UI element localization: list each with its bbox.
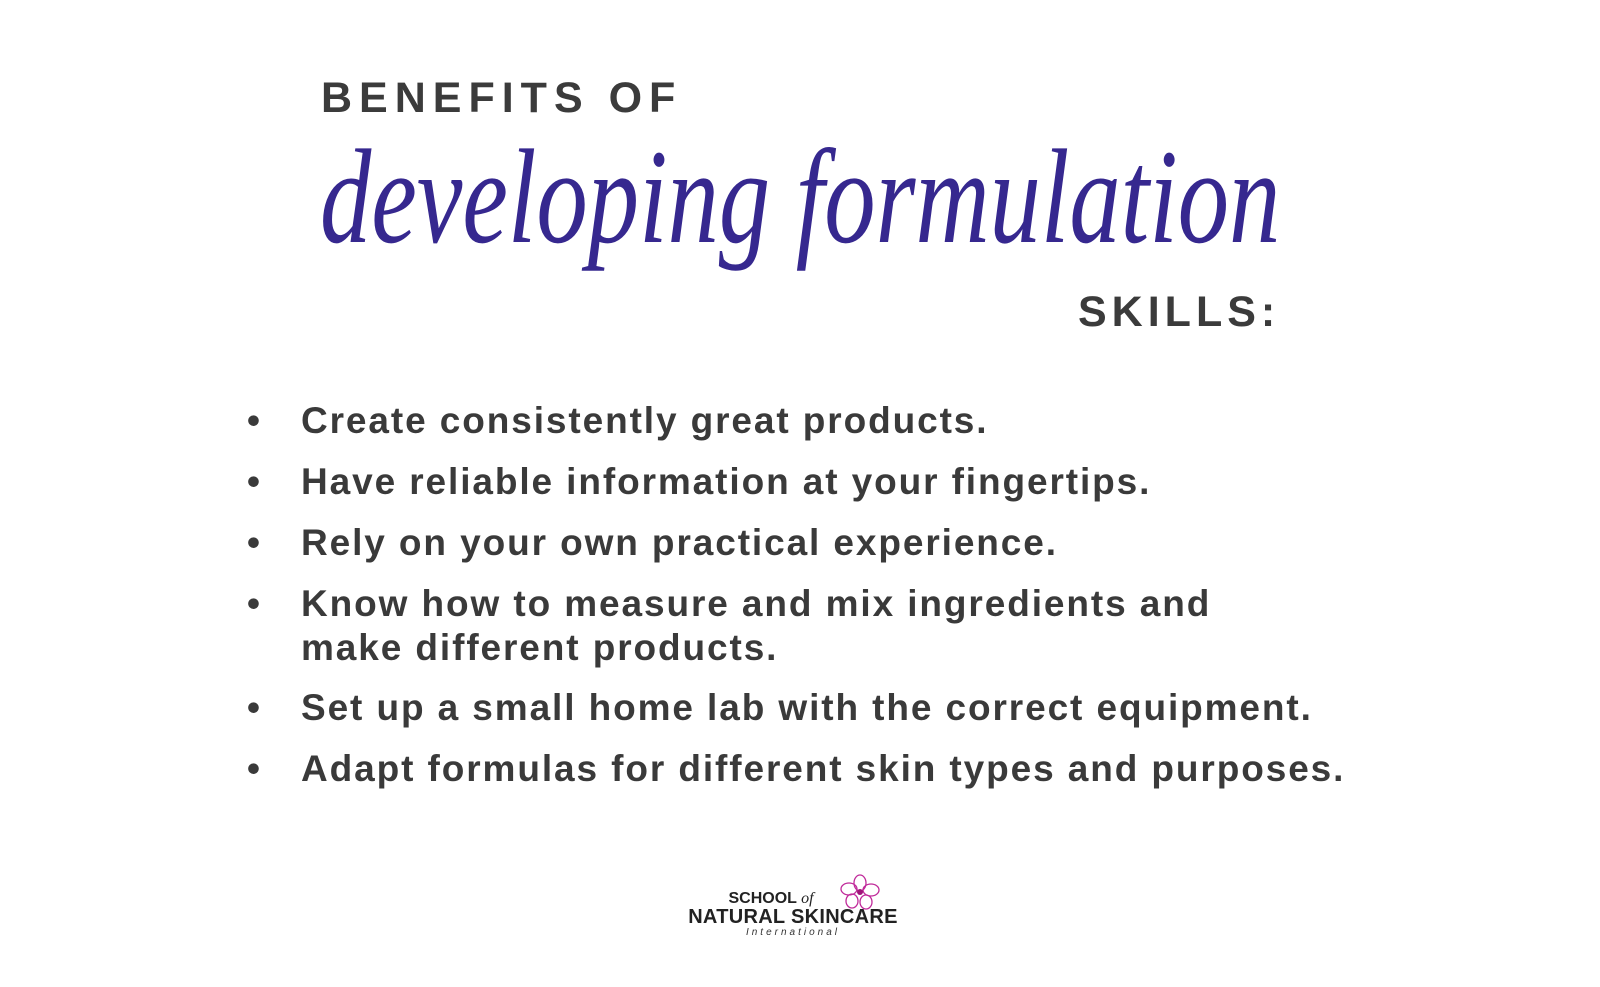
bullet 2: • — [247, 461, 262, 502]
icon: flower — [840, 874, 880, 910]
bullet 4: • — [247, 583, 262, 624]
bullet 6: • — [247, 748, 262, 789]
logo — [688, 874, 898, 938]
logo: International — [746, 927, 840, 938]
bullet 4 — [247, 583, 1211, 668]
bullet 4: Know how to measure and mix ingredients and — [301, 583, 1211, 624]
bullet 1: • — [247, 400, 262, 441]
logo: NATURAL SKINCARE — [688, 906, 898, 928]
bullet 5: • — [247, 687, 262, 728]
bullet 3: Rely on your own practical experience. — [301, 522, 1058, 563]
logo: SCHOOL of — [728, 890, 814, 907]
heading: script title: developing formulation — [320, 123, 1280, 272]
heading: skills: SKILLS: — [1078, 288, 1280, 336]
bullet 1: Create consistently great products. — [301, 400, 988, 441]
bullet 6: Adapt formulas for different skin types and purposes. — [301, 748, 1345, 789]
bullet 2: Have reliable information at your fingertips. — [301, 461, 1151, 502]
bullet 5: Set up a small home lab with the correct equipment. — [301, 687, 1313, 728]
heading: benefits of: BENEFITS OF — [321, 74, 682, 122]
bullet 4: make different products. — [301, 627, 778, 668]
bullet 3: • — [247, 522, 262, 563]
